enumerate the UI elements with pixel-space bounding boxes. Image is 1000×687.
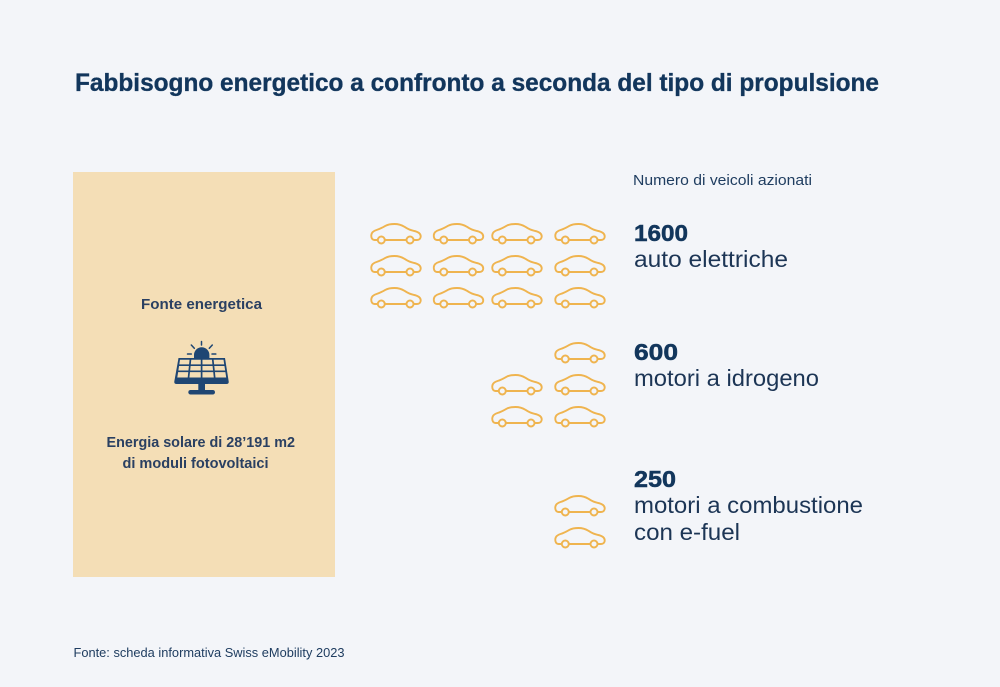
label: 600 hydrogen engines: 600: [634, 339, 678, 365]
label: 1600 electric cars: [634, 220, 788, 272]
label: 600 hydrogen engines: motori a idrogeno: [634, 365, 819, 391]
icons: 250 e-fuel engines: [555, 496, 605, 548]
label: 1600 electric cars: auto elettriche: [634, 246, 788, 272]
label: 1600 electric cars: 1600: [634, 220, 688, 246]
icon: solar panel: [174, 342, 229, 394]
title: Fabbisogno energetico a confronto a seconda del tipo di propulsione: [75, 69, 879, 97]
label: 250 e-fuel engines: motori a combustione: [634, 492, 863, 518]
label: 250 e-fuel engines: 250: [634, 466, 676, 492]
panel heading: Fonte energetica: [141, 296, 263, 313]
icons: 1600 electric cars: [371, 224, 605, 308]
label: 250 e-fuel engines: con e-fuel: [634, 519, 740, 545]
label: 600 hydrogen engines: [634, 339, 819, 391]
panel: energy source: [73, 172, 335, 577]
source note: Fonte: scheda informativa Swiss eMobility 2023: [74, 645, 344, 660]
icons: 600 hydrogen engines: [492, 343, 605, 426]
panel description: Energia solare di 28’191 m2: [106, 434, 295, 451]
label: 250 e-fuel engines: [634, 466, 863, 545]
panel description: di moduli fotovoltaici: [122, 455, 268, 472]
panel description: [106, 434, 295, 472]
column heading: Numero di veicoli azionati: [633, 172, 812, 189]
